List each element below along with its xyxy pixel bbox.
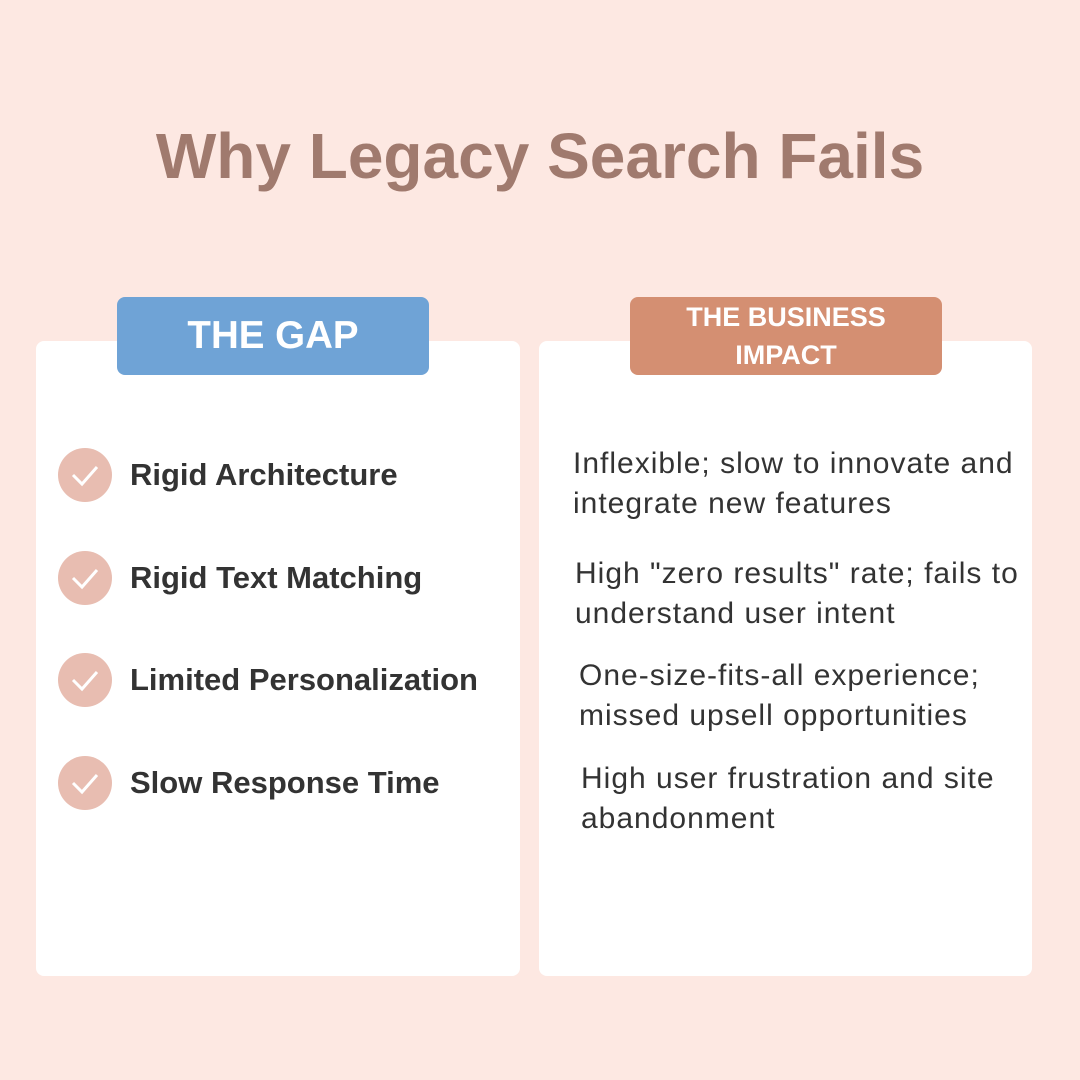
badge: the gap: THE GAP [187, 314, 359, 357]
impact 2: High "zero results" rate; fails to [575, 557, 1019, 590]
item: limited personalization: Limited Personalization [130, 662, 478, 697]
impact 2: understand user intent [575, 597, 896, 630]
badge: business impact: IMPACT [735, 340, 837, 370]
title: Why Legacy Search Fails [156, 120, 924, 192]
item: rigid text matching: Rigid Text Matching [130, 560, 422, 595]
item: limited personalization [58, 653, 478, 707]
item: rigid architecture [58, 448, 398, 502]
badge: the gap [117, 297, 429, 375]
panel: the gap [36, 341, 520, 976]
badge: business impact [630, 297, 942, 375]
badge: business impact: THE BUSINESS [686, 302, 886, 332]
item: rigid architecture: Rigid Architecture [130, 457, 398, 492]
panel: business impact [539, 341, 1032, 976]
impact 1 [573, 447, 1014, 520]
item: slow response time [58, 756, 440, 810]
item: slow response time: Slow Response Time [130, 765, 440, 800]
item: rigid text matching [58, 551, 422, 605]
impact 4: High user frustration and site [581, 762, 995, 795]
impact 1: Inflexible; slow to innovate and [573, 447, 1014, 480]
impact 3 [579, 659, 980, 732]
impact 2 [575, 557, 1019, 630]
impact 3: One-size-fits-all experience; [579, 659, 980, 692]
impact 1: integrate new features [573, 487, 892, 520]
impact 4 [581, 762, 995, 835]
impact 3: missed upsell opportunities [579, 699, 968, 732]
impact 4: abandonment [581, 802, 776, 835]
